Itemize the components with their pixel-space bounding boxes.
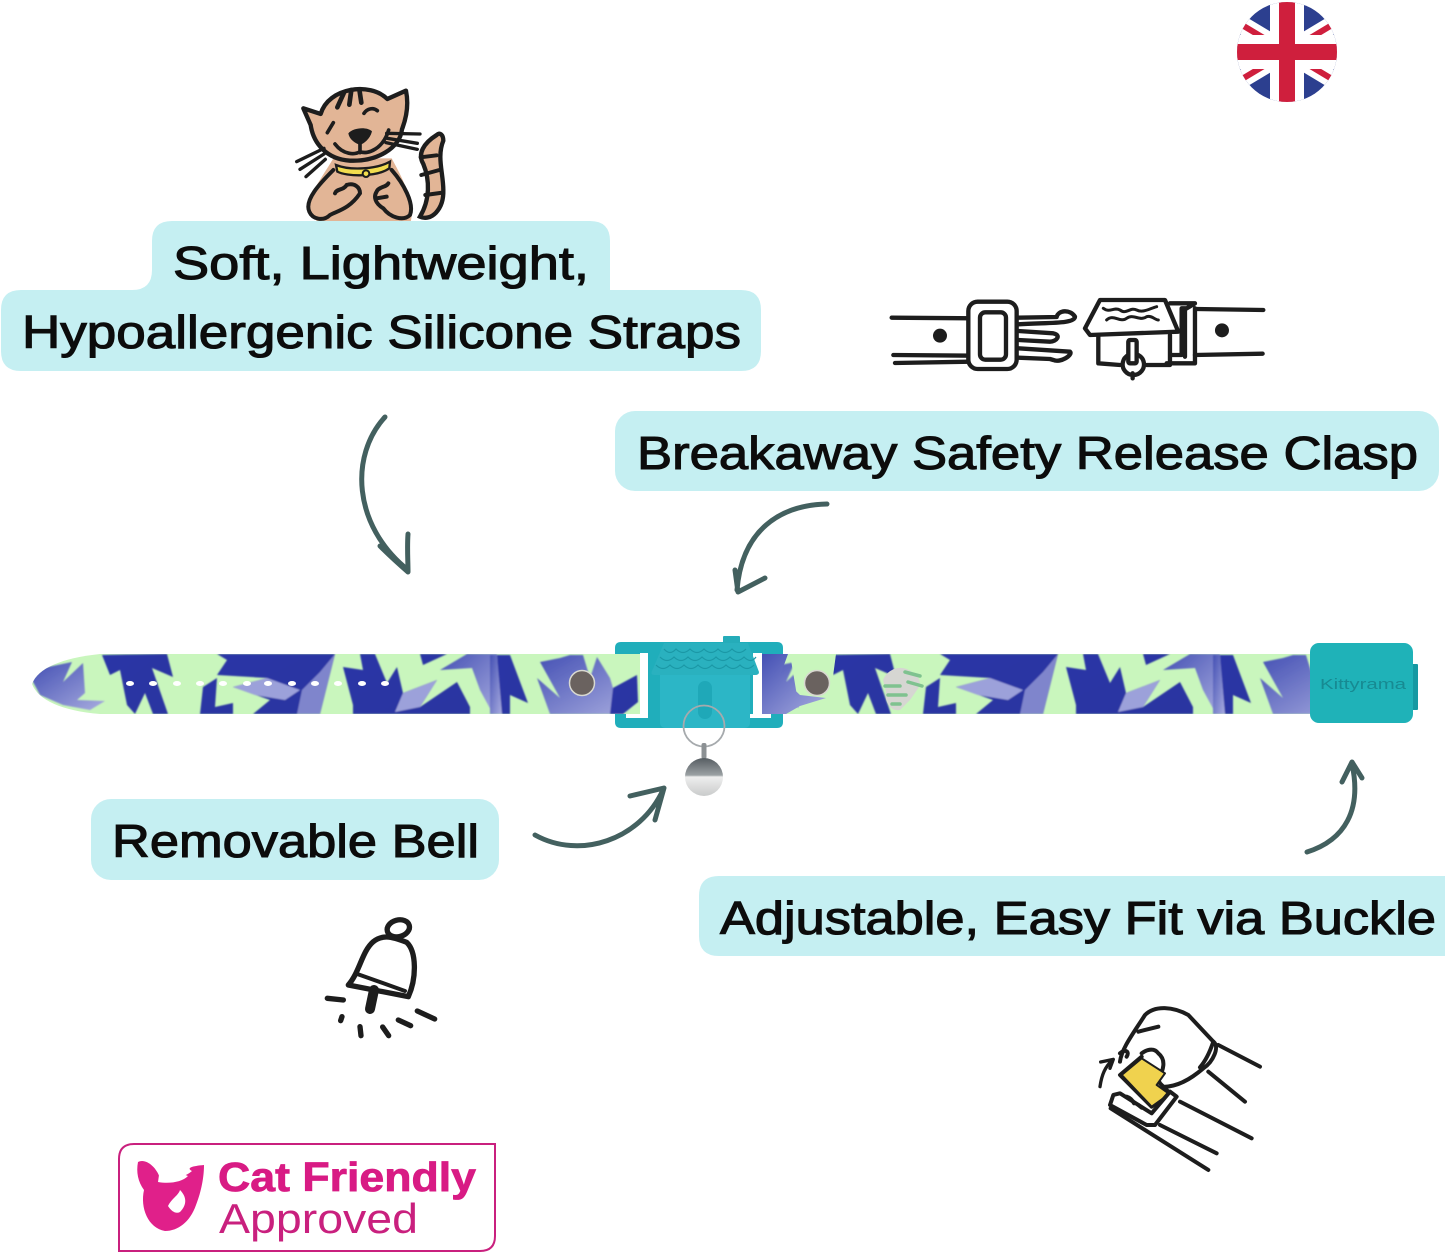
arrow: clasp callout to clasp [735, 504, 827, 592]
icon: breakaway clasp sketch [892, 300, 1263, 378]
text: cat friendly: Cat Friendly [218, 1154, 476, 1200]
strap: left section [30, 654, 642, 714]
buckle: release clasp [626, 636, 771, 728]
charm: removable bell [684, 706, 724, 796]
callout: breakaway safety release clasp [615, 411, 1439, 491]
text: line two: Hypoallergenic Silicone Straps [22, 306, 741, 358]
strap: right section [755, 654, 1361, 714]
strap: adjustment holes [126, 681, 389, 686]
icon: ringing bell [327, 917, 435, 1036]
buckle: adjuster with brand [1310, 643, 1418, 723]
heading: soft lightweight straps [1, 221, 761, 371]
callout background [1, 221, 761, 371]
clip loop for bell [698, 681, 712, 719]
callout: adjustable fit [699, 876, 1445, 956]
rivet: right [804, 670, 830, 696]
badge border [119, 1144, 495, 1251]
flag: UK roundel [1237, 2, 1337, 102]
text: approved: Approved [219, 1195, 418, 1242]
charm: elephant [883, 668, 922, 710]
callout background [91, 799, 499, 880]
text: line one: Soft, Lightweight, [173, 237, 589, 289]
brand text: Kittyrama [1320, 676, 1407, 693]
clasp slot: right [749, 653, 771, 718]
rivet: left [570, 670, 594, 696]
icon: hand adjusting buckle [1100, 1008, 1260, 1170]
clasp house body [660, 670, 750, 728]
arrow: straps to collar [362, 417, 408, 572]
text: Adjustable, Easy Fit via Buckle [720, 892, 1436, 944]
callout background [699, 876, 1445, 956]
badge: cat friendly approved [119, 1144, 495, 1251]
clasp frame [615, 642, 783, 728]
arrow: bell callout to bell [535, 788, 664, 846]
callout: removable bell [91, 799, 499, 880]
arrow: buckle callout to buckle [1307, 762, 1362, 852]
callout background [615, 411, 1439, 491]
clasp slot: left [626, 653, 648, 718]
text: Breakaway Safety Release Clasp [637, 427, 1418, 479]
badge icon: pink cat [137, 1161, 204, 1231]
icon: smiling cat wearing a yellow collar [297, 89, 443, 222]
clasp house roof [651, 643, 759, 675]
text: Removable Bell [112, 815, 479, 867]
clasp house chimney [723, 636, 740, 646]
product: collar [30, 636, 1418, 796]
roof scales [656, 649, 756, 668]
